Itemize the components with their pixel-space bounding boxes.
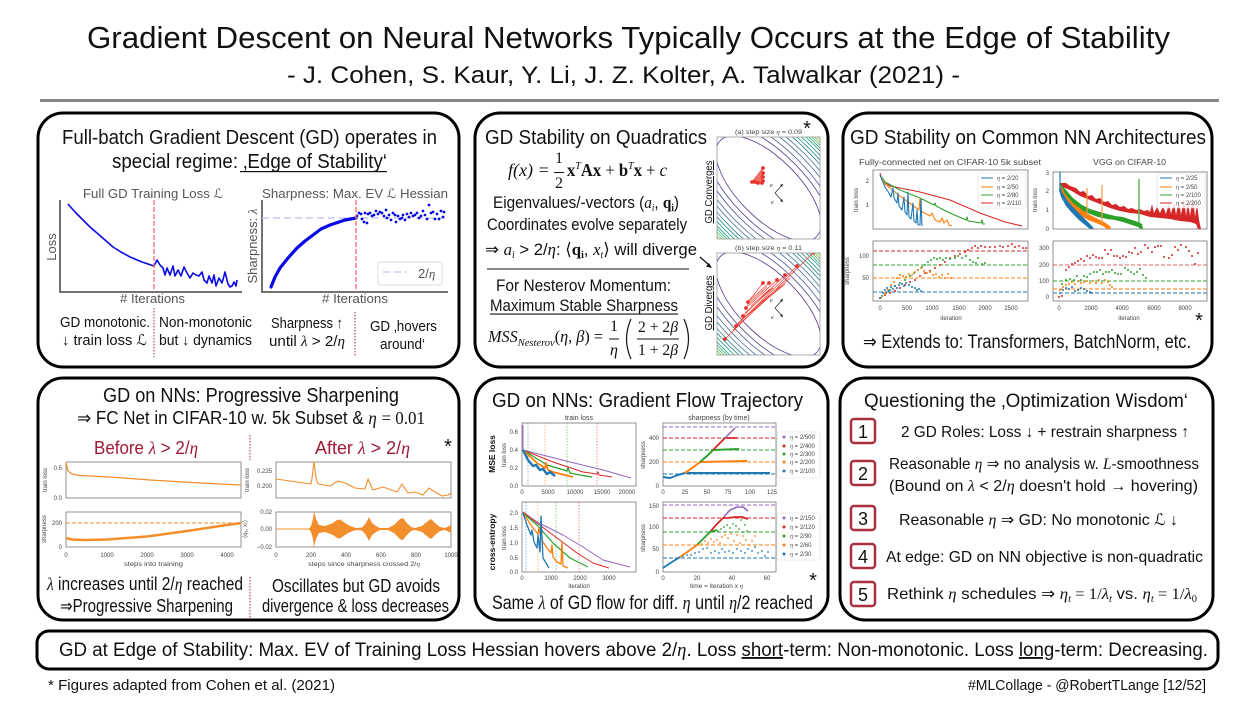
legend: η = 2/20 [997,176,1019,182]
chart: cross-entropy train loss: 1.5 [510,526,519,532]
footnote marker: * [1195,310,1203,332]
chart: FC net train loss: Fully-connected net on CIFAR-10 5k subset [859,157,1042,167]
item 3 [851,506,1178,530]
chart: FC net sharpness [845,241,1028,322]
chart: MSE train loss: train loss [502,443,508,467]
panel heading: Questioning the ‚Optimization Wisdom‘ [864,391,1188,412]
chart: oscillation after [242,510,458,568]
formula: quadratic objective: 1 [555,150,563,167]
formula: quadratic objective: T [628,160,635,172]
text block: sharpness notes: Sharpness ↑ [271,315,343,332]
footnote marker: * [809,570,817,592]
chart: cross-entropy train loss: 1000 [544,576,558,582]
text block: sharpness notes: until λ > 2/η [269,333,345,350]
legend: η = 2/50 [997,185,1019,191]
chart: FC net train loss: 1 [866,203,870,209]
formula: quadratic objective: Ax [581,160,601,180]
chart: MSE train loss: 10000 [567,490,584,496]
legend: MSE etas: η = 2/300 [790,452,816,458]
chart: MSE train loss: 0.2 [510,466,519,472]
item 2: (Bound on λ < 2/η doesn't hold → hovering) [889,478,1198,495]
panel: stability on quadratics [474,112,830,368]
panel heading: special regime: ‚Edge of Stability‘ [112,151,387,173]
chart: MSE train loss: 0 [520,490,524,496]
chart: MSE sharpness: 125 [767,490,778,496]
formula: quadratic objective: x [634,160,642,180]
title: Gradient Descent on Neural Networks Typically Occurs at the Edge of Stability [87,20,1170,55]
legend: cross-entropy etas [777,513,820,560]
panel heading: GD on NNs: Progressive Sharpening [103,385,399,407]
chart: cross-entropy sharpness: 60 [764,576,771,582]
chart: MSE sharpness: 25 [682,490,689,496]
chart: sharpness before: sharpness [42,515,48,543]
panel heading: GD Stability on Common NN Architectures [850,127,1206,149]
text block: Nesterov momentum: Maximum Stable Sharpness [490,296,678,315]
chart: FC net sharpness: 2500 [1004,306,1018,312]
chart: cross-entropy sharpness: 0 [661,576,665,582]
chart: FC net sharpness: iteration [940,316,962,322]
subheading: after: After λ > 2/η [315,438,410,458]
legend [978,173,1026,208]
chart legend [378,262,442,285]
chart: VGG train loss [1033,157,1207,233]
formula: maximum stable sharpness: 1 + 2β [638,342,678,359]
chart: oscillation after: 0.02 [260,510,273,516]
item 3: 3 [858,509,868,529]
chart: VGG train loss: 2 [1046,189,1050,195]
chart: train loss before: 0.0 [54,496,63,502]
chart: VGG sharpness: 0 [1046,295,1050,301]
chart: VGG train loss: 0 [1046,227,1050,233]
panel heading: ⇒ FC Net in CIFAR-10 w. 5k Subset & η = 0.01 [77,408,425,428]
chart: cross-entropy train loss: iteration [568,584,590,590]
line chart: full GD training loss: # Iterations [120,292,185,306]
legend: cross-entropy etas: η = 2/60 [790,543,812,549]
chart: VGG sharpness: 200 [1039,263,1050,269]
formula: quadratic objective: x [567,160,576,180]
text block: eigen decomposition: q [663,193,674,214]
text block: loss notes: GD monotonic. [60,314,150,331]
item 5: vs. [1112,586,1143,603]
chart: VGG sharpness [1039,241,1207,322]
chart: cross-entropy train loss: 0.5 [510,556,519,562]
chart: train loss after: 0.225 [257,469,273,475]
chart: MSE sharpness: 400 [649,436,660,442]
chart legend: 2/η [418,266,435,281]
chart: oscillation after: 200 [306,553,317,559]
chart: MSE train loss: 20000 [619,490,636,496]
scatter chart: sharpness: # Iterations [322,292,388,306]
text block: same sharpness: Same λ of GD flow for diff. η until η/2 reached [492,593,813,614]
panel heading [62,127,437,173]
panel heading [77,385,425,428]
panel heading: GD Stability on Quadratics [485,127,707,149]
legend: η = 2/25 [1176,176,1198,182]
chart: FC net sharpness: 2000 [978,306,992,312]
text block: loss notes: but ↓ dynamics [159,332,252,349]
contour plot: GD converges: GD Converges [703,160,715,224]
text block: eigen decomposition: t [601,250,603,261]
row label: cross-entropy: cross-entropy [487,513,497,570]
text block: eigen decomposition: i [581,250,584,261]
chart: oscillation after: 600 [376,553,387,559]
text block: eigen decomposition: x [592,240,603,261]
chart: FC net train loss: 2 [866,179,870,185]
chart: MSE train loss: 0.0 [510,484,519,490]
formula: maximum stable sharpness: η [610,342,618,359]
text block: extends to: ⇒ Extends to: Transformers, BatchNorm, etc. [863,332,1191,353]
chart: sharpness before: 200 [52,521,63,527]
panel: progressive sharpening [38,378,459,620]
contour plot: GD converges: e [771,200,774,206]
item 5: = 1/ [1071,586,1102,603]
chart: oscillation after: 1000 [444,553,458,559]
chart: cross-entropy train loss: 0 [520,576,524,582]
chart: FC net sharpness: 50 [862,276,870,282]
chart: MSE sharpness: 100 [745,490,756,496]
chart: FC net sharpness: 1500 [952,306,966,312]
panel heading: Full-batch Gradient Descent (GD) operates in [62,127,437,149]
chart: MSE sharpness: sharpness (by time) [688,415,750,422]
chart: MSE sharpness [641,415,778,496]
item 2 [851,456,1199,495]
scatter chart: sharpness [245,186,448,306]
formula: maximum stable sharpness: η, β) = [560,327,604,346]
chart: VGG sharpness: 100 [1039,279,1050,285]
formula: maximum stable sharpness: 1 [610,318,618,335]
chart: cross-entropy train loss: 1.0 [510,541,519,547]
scatter chart: sharpness: Sharpness: Max. EV ℒ Hessian [262,186,448,201]
text block: eigen decomposition: i [671,203,674,214]
formula: quadratic objective: + b [606,160,629,180]
legend: η = 2/50 [1176,185,1198,191]
contour plot: GD diverges [704,246,820,356]
chart: MSE train loss: train loss [565,415,594,422]
legend: cross-entropy etas: η = 2/30 [790,552,812,558]
item 2: Reasonable η ⇒ no analysis w. L-smoothness [889,456,1199,473]
chart: VGG sharpness: 8000 [1178,306,1192,312]
chart: cross-entropy sharpness: time = iteration x η [690,584,743,590]
subtitle: authors: - J. Cohen, S. Kaur, Y. Li, J. Z. Kolter, A. Talwalkar (2021) - [287,62,960,89]
legend: MSE etas: η = 2/100 [790,469,816,475]
item 4: 4 [858,547,868,567]
item 5: λ [1183,586,1192,603]
chart: train loss before: train loss [43,468,49,492]
chart: cross-entropy sharpness: 50 [652,547,660,553]
item 1: 1 [858,422,868,442]
legend: cross-entropy etas: η = 2/120 [790,525,816,531]
chart: VGG sharpness: 300 [1039,246,1050,252]
formula: maximum stable sharpness [487,318,688,359]
text block: eigen decomposition: ) [674,193,679,212]
contour plot: GD diverges: (b) step size η = 0.11 [735,245,802,252]
chart: train loss after: train loss [245,468,251,492]
formula: maximum stable sharpness: MSS [488,327,519,346]
chart: VGG train loss: VGG on CIFAR-10 [1093,157,1166,167]
item 2: 2 [858,464,868,484]
text block: oscillation note [262,576,449,616]
chart: VGG train loss: train loss [1033,188,1039,212]
chart: sharpness before: 4000 [220,553,234,559]
text block: loss notes [60,314,252,349]
chart: sharpness before: steps into training [124,562,183,568]
panel: edge of stability regime [38,113,459,367]
text block: sharpness notes: GD ‚hovers [370,318,437,335]
credit: #MLCollage - @RobertTLange [12/52] [968,677,1206,694]
chart: FC net train loss [854,157,1042,229]
chart: FC net sharpness: sharpness [845,257,851,285]
item 5: t [1068,594,1071,605]
chart: FC net sharpness: 0 [878,306,882,312]
chart: MSE train loss [502,415,636,496]
chart: sharpness before: 0 [59,545,63,551]
formula: maximum stable sharpness: 2 + 2β [638,319,678,336]
subheading: before: Before λ > 2/η [94,438,198,458]
line chart: full GD training loss: Full GD Training Loss ℒ [83,186,223,201]
text block: oscillation note: divergence & loss decreases [262,596,449,616]
chart: cross-entropy sharpness: 0 [656,570,660,576]
text block: eigen decomposition: Eigenvalues/-vectors (a [493,193,661,212]
text block: eigen decomposition: > 2/ [515,240,548,259]
chart: sharpness before: 0 [64,553,68,559]
line chart: full GD training loss [44,186,242,306]
chart: FC net sharpness: 500 [902,306,913,312]
chart: VGG sharpness: 2000 [1084,306,1098,312]
formula: maximum stable sharpness: Nesterov [517,337,555,349]
text block: progressive sharpening note [46,574,243,616]
text block: eigen decomposition [485,193,697,261]
chart: VGG sharpness: 4000 [1115,306,1129,312]
chart: VGG train loss: 3 [1046,171,1050,177]
chart: cross-entropy train loss: 3000 [602,576,616,582]
contour plot: GD diverges: e [770,298,773,304]
chart: MSE train loss: 0.4 [510,448,519,454]
chart: oscillation after: 800 [411,553,422,559]
text block: progressive sharpening note: ⇒Progressive Sharpening [60,596,233,616]
legend [1157,174,1205,208]
text block: sharpness notes: around‘ [380,336,425,353]
chart: train loss before: 0.5 [54,466,63,472]
formula: quadratic objective [508,150,667,192]
chart: oscillation after: 400 [341,553,352,559]
line chart: full GD training loss: Loss [44,233,59,261]
item 5: λ [1101,586,1112,605]
contour plot: GD converges: * [803,118,811,140]
text block: eigen decomposition: , [584,240,593,259]
text block: loss notes: ↓ train loss ℒ [62,332,147,349]
formula: quadratic objective: T [575,160,582,172]
item 5: Rethink η schedules ⇒ η [887,586,1068,603]
chart: MSE train loss: 5000 [541,490,555,496]
item 4 [851,544,1203,568]
panel: gradient flow trajectory [475,378,828,620]
item 5 [851,582,1197,606]
summary bar: GD at Edge of Stability: Max. EV of Training Loss Hessian hovers above 2/η. Loss short-term: Non-monotonic. Loss long-term: Decreasing. [59,640,1208,661]
chart: train loss after: 0.200 [257,484,273,490]
contour plot: GD converges: (a) step size η = 0.09 [735,129,802,136]
chart: cross-entropy train loss: train loss [502,526,508,550]
item 3: Reasonable η ⇒ GD: No monotonic ℒ ↓ [899,512,1178,529]
panel: questioning optimization wisdom [840,378,1213,620]
chart: MSE sharpness: 200 [649,460,660,466]
chart: cross-entropy sharpness: 150 [649,504,660,510]
chart: VGG train loss: 1 [1046,208,1050,214]
text block: eigen decomposition: Coordinates evolve separately [487,215,687,234]
chart: MSE sharpness: 50 [704,490,711,496]
legend: η = 2/200 [1176,201,1202,207]
chart: oscillation after: 0.00 [260,527,273,533]
summary bar [37,631,1218,669]
legend: cross-entropy etas: η = 2/90 [790,534,812,540]
text block: eigen decomposition: , [654,193,663,212]
arrow: to divergence plot [700,257,712,268]
text block: eigen decomposition: i [512,250,515,261]
contour plot: GD converges [705,121,820,240]
chart: VGG sharpness: iteration [1118,316,1140,322]
formula: maximum stable sharpness: ( [555,327,560,346]
chart: MSE sharpness: 75 [725,490,732,496]
footnote marker: * [444,436,452,458]
legend: MSE etas [777,432,820,478]
chart: cross-entropy sharpness: sharpness [641,524,647,552]
text block: sharpness notes [269,315,437,353]
text block: eigen decomposition: η: ⟨q [548,240,581,259]
chart: cross-entropy sharpness: 40 [729,576,736,582]
chart: train loss before [43,462,241,502]
chart: MSE sharpness: sharpness [641,441,647,469]
item 5: t [1151,594,1154,605]
panel: stability on NN architectures [843,113,1212,367]
chart: cross-entropy sharpness [641,502,776,590]
chart: sharpness before: 2000 [140,553,154,559]
text block: Nesterov momentum: For Nesterov Momentum: [496,276,671,295]
legend: η = 2/100 [1176,193,1202,199]
chart: VGG sharpness: 0 [1057,306,1061,312]
chart: train loss after [245,462,451,498]
contour plot: GD diverges: e [771,315,774,321]
item 5: 5 [858,585,868,605]
text block: Nesterov momentum [490,276,678,315]
chart: sharpness before [42,512,241,568]
item 5: t [1109,594,1112,605]
text block: eigen decomposition: i [652,203,655,214]
legend: MSE etas: η = 2/500 [790,435,816,441]
chart: MSE sharpness: 0 [661,490,665,496]
chart: oscillation after: 0 [274,553,278,559]
text block: oscillation note: Oscillates but GD avoids [272,576,440,596]
text block: eigen decomposition: ⟩ will diverge [603,240,697,259]
text block: loss notes: Non-monotonic [159,314,252,331]
item 1 [851,419,1189,443]
contour plot: GD diverges: GD Diverges [703,276,715,330]
scatter chart: sharpness: Sharpness: λ [245,208,260,284]
item 5: 0 [1192,594,1197,605]
chart: MSE train loss: 0.6 [510,430,519,436]
chart: oscillation after: steps since sharpness crossed 2/ η [308,562,420,568]
chart: MSE train loss: 15000 [594,490,611,496]
chart: FC net train loss: train loss [854,188,860,212]
chart: sharpness before: 1000 [100,553,114,559]
text block: progressive sharpening note: λ increases until 2/η reached [46,574,243,594]
row label: MSE loss: MSE loss [487,435,497,473]
chart: MSE sharpness: 0 [656,484,660,490]
formula: quadratic objective: + c [646,160,668,180]
formula: quadratic objective: f(x) = [508,160,550,181]
item 4: At edge: GD on NN objective is non-quadratic [886,549,1203,566]
chart: oscillation after: ⟨q₁, xₜ⟩ [242,520,249,538]
legend: η = 2/80 [997,193,1019,199]
chart: oscillation after: −0.02 [257,545,273,551]
legend: cross-entropy etas: η = 2/150 [790,516,816,522]
chart: cross-entropy sharpness: 20 [694,576,701,582]
chart: cross-entropy train loss: 2000 [573,576,587,582]
legend: MSE etas: η = 2/200 [790,460,816,466]
contour plot: GD converges: e [770,183,773,189]
chart: cross-entropy sharpness: 100 [649,525,660,531]
panel heading: GD on NNs: Gradient Flow Trajectory [492,390,803,412]
chart: cross-entropy train loss: 0.0 [510,570,519,576]
chart: sharpness before: 3000 [180,553,194,559]
item 5: = 1/ [1154,586,1185,603]
legend: MSE etas: η = 2/400 [790,444,816,450]
chart: FC net sharpness: 1000 [925,306,939,312]
footnote: figure source: * Figures adapted from Cohen et al. (2021) [48,677,335,694]
formula: quadratic objective: 2 [555,175,563,192]
legend: η = 2/110 [997,201,1022,207]
chart: cross-entropy train loss: 2.0 [510,511,519,517]
chart: FC net sharpness: 100 [859,254,870,260]
text block: eigen decomposition: ⇒ a [485,240,512,259]
item 5: η [1143,586,1154,605]
item 1: 2 GD Roles: Loss ↓ + restrain sharpness ↑ [901,424,1189,441]
chart: VGG sharpness: 6000 [1147,306,1161,312]
chart: cross-entropy train loss [502,502,636,590]
